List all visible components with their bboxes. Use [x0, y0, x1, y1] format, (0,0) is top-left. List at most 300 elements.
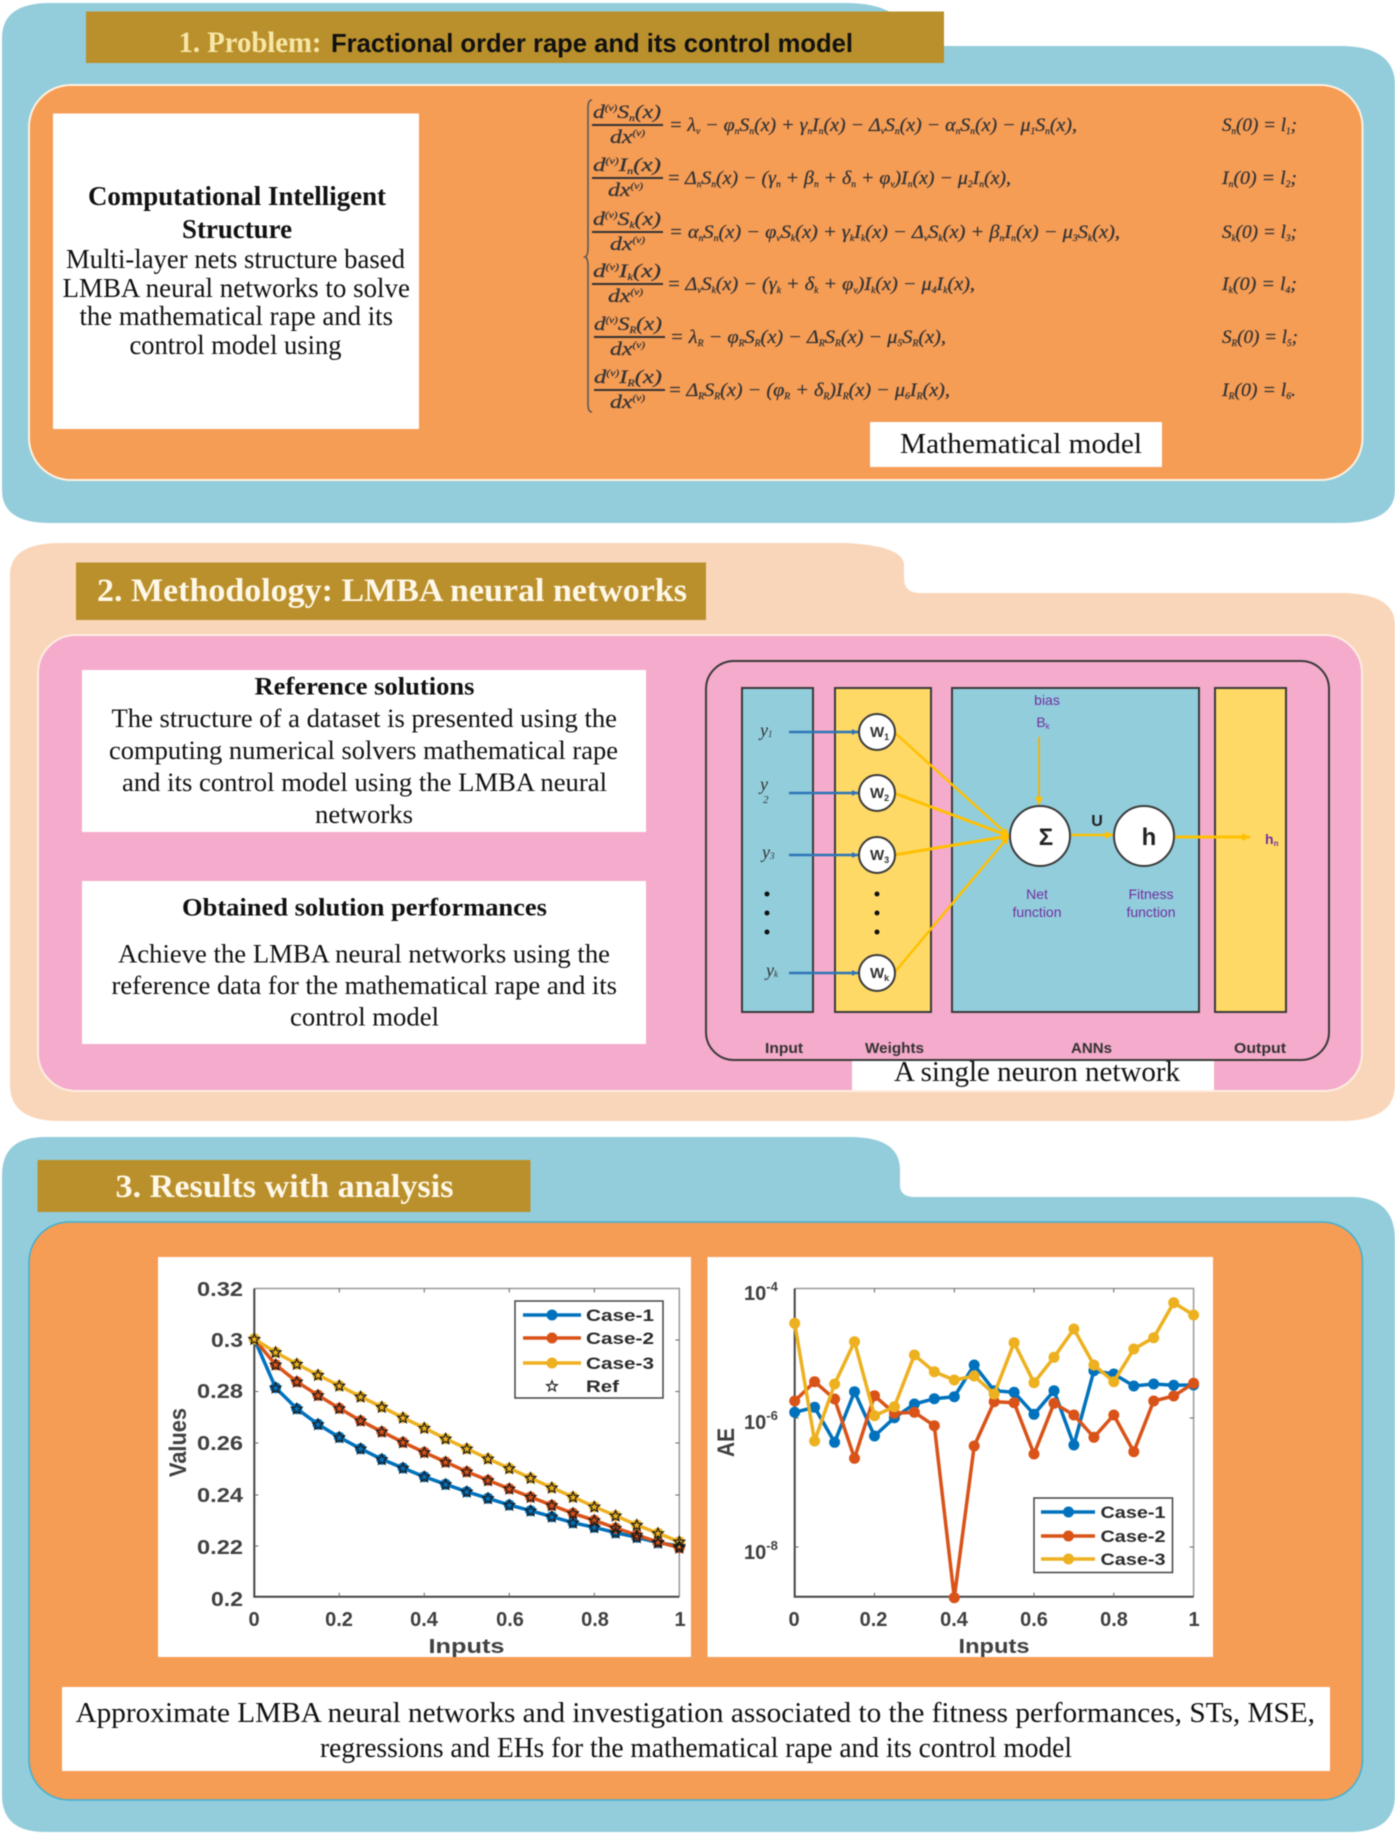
- equation 1: (x) − Δ: [824, 115, 881, 136]
- equation 2: d: [593, 155, 602, 176]
- caption: Mathematical model: [870, 422, 1162, 467]
- equation 1: n: [1232, 126, 1237, 136]
- equation 6: (x): [635, 367, 662, 388]
- equation 2: I: [617, 155, 629, 176]
- labels: bias, net function, fitness function, output: k: [1046, 722, 1051, 731]
- labels: bias, net function, fitness function, output: Net: [1026, 886, 1048, 902]
- input labels: k: [774, 969, 779, 979]
- equation 1: v: [696, 126, 700, 136]
- equation 5: (v): [606, 315, 618, 325]
- equation 2: I: [1222, 168, 1228, 189]
- text block: results summary: [62, 1687, 1330, 1771]
- y axis tick labels: 0.24: [197, 1485, 244, 1507]
- equation 3: d: [593, 209, 602, 230]
- node: fitness function h: h: [1142, 824, 1156, 851]
- equation 4: = Δ: [667, 274, 695, 295]
- equation 3: k: [1232, 233, 1237, 243]
- equation 4: k: [1229, 285, 1234, 295]
- equation 3: n: [1011, 233, 1017, 243]
- series: Case-2: [254, 1339, 679, 1548]
- equation 2: v: [890, 179, 895, 189]
- column labels: Output: [1234, 1040, 1286, 1057]
- equation 5: (x) − μ: [841, 327, 897, 348]
- y axis tick labels: 10: [744, 1412, 766, 1434]
- equation 3: S: [928, 222, 939, 243]
- equation 6: (x) − (φ: [720, 380, 784, 401]
- equation 4: ;: [1290, 274, 1297, 295]
- equation 1: dx: [610, 127, 628, 148]
- equation 6: = Δ: [668, 380, 696, 401]
- equation 3: k: [850, 233, 855, 243]
- equation 3: dx: [610, 234, 628, 255]
- line chart: AE vs Inputs: [708, 1257, 1213, 1658]
- equation 4: 4: [1286, 285, 1291, 295]
- equation 3: ;: [1291, 222, 1297, 243]
- equation 5: − φ: [703, 327, 739, 348]
- equation 1: ;: [1291, 115, 1297, 136]
- equation 5: S: [825, 327, 836, 348]
- equation 2: (x) − μ: [912, 168, 968, 189]
- equation 1: v: [881, 126, 885, 136]
- x axis tick labels: 1: [674, 1609, 686, 1631]
- equation 4: S: [701, 274, 712, 295]
- equation 5: S: [902, 327, 913, 348]
- equation 2: (x) − (γ: [716, 168, 776, 189]
- equation 4: k: [712, 285, 717, 295]
- equation 2: S: [701, 168, 712, 189]
- input labels: 2: [763, 794, 769, 806]
- equation 2: n: [627, 166, 634, 176]
- equation 3: S: [1222, 222, 1232, 243]
- series: Case-1: [254, 1339, 679, 1546]
- axes box: [795, 1288, 1194, 1597]
- ellipsis dots: [764, 892, 880, 934]
- equation 3: k: [791, 233, 796, 243]
- equation 4: (x) − (γ: [716, 274, 777, 295]
- equation 5: = λ: [670, 327, 696, 348]
- equation 6: + δ: [790, 380, 825, 401]
- equation 1: (x),: [1050, 115, 1077, 136]
- equation 1: S: [960, 115, 971, 136]
- text block: Computational Intelligent Structure: Computational Intelligent: [88, 181, 386, 211]
- equation 1: (v): [632, 128, 645, 138]
- labels: bias, net function, fitness function, output: n: [1274, 839, 1279, 848]
- text block: Computational Intelligent Structure: the mathematical rape and its: [80, 301, 393, 331]
- equation 2: dx: [608, 180, 626, 201]
- equation 6: R: [842, 391, 849, 401]
- equation 3: k: [629, 220, 636, 230]
- equation 6: (x) − μ: [849, 380, 905, 401]
- equation 1: (x): [635, 102, 661, 123]
- text block: Reference solutions: networks: [315, 800, 413, 829]
- equation 3: (x) − Δ: [865, 222, 924, 243]
- column labels: ANNs: [1071, 1040, 1112, 1057]
- x axis tick labels: 0.2: [325, 1609, 353, 1631]
- labels: bias, net function, fitness function, output: function: [1126, 904, 1176, 920]
- y axis tick labels: -6: [766, 1408, 778, 1423]
- equation 1: n: [749, 126, 755, 136]
- equation 5: S: [618, 314, 630, 335]
- equation 4: (x),: [947, 274, 975, 295]
- equation 3: (x) + γ: [795, 222, 850, 243]
- equation 2: n: [851, 179, 857, 189]
- equation 2: ;: [1290, 168, 1297, 189]
- equation 3: v: [776, 233, 781, 243]
- equation 6: (x),: [922, 380, 950, 401]
- axis titles: Values: [165, 1408, 192, 1477]
- equation 3: (x) − μ: [1016, 222, 1073, 243]
- equation 1: S: [617, 102, 630, 123]
- x axis tick labels: 0.2: [860, 1609, 887, 1631]
- equation 6: R: [626, 378, 635, 388]
- series: Case-1: [795, 1365, 1194, 1445]
- text block: Obtained solution performances: Achieve the LMBA neural networks using the: [118, 940, 610, 968]
- equation 3: S: [703, 222, 714, 243]
- input labels: y: [762, 842, 770, 862]
- equation 3: (x) + β: [943, 222, 1000, 243]
- equation 1: [592, 102, 1297, 148]
- equation 5: R: [738, 338, 745, 348]
- caption: A single neuron network: A single neuron network: [894, 1056, 1181, 1088]
- text block: Reference solutions: The structure of a dataset is presented using the: [112, 704, 617, 733]
- equation 4: k: [943, 285, 949, 295]
- equation 3: S: [781, 222, 791, 243]
- weight labels: 2: [884, 793, 889, 803]
- text block: Obtained solution performances: control model: [290, 1002, 439, 1032]
- equation 1: n: [1045, 126, 1050, 136]
- input labels: 1: [768, 729, 772, 739]
- equation 3: I: [1003, 222, 1013, 243]
- equation 5: R: [911, 338, 919, 348]
- equation 4: + δ: [781, 274, 815, 295]
- axis titles: Inputs: [428, 1636, 504, 1658]
- y axis tick labels: 10: [744, 1542, 766, 1564]
- column: ANNs: [952, 688, 1199, 1012]
- equation 5: R: [1231, 338, 1238, 348]
- equation 3: (0) = l: [1236, 222, 1286, 243]
- equation 5: dx: [610, 339, 628, 360]
- equation 3: k: [1088, 233, 1093, 243]
- equation 1: n: [629, 113, 635, 123]
- equation 1: (x) − α: [900, 115, 957, 136]
- equation 3: (v): [632, 235, 645, 245]
- equation 5: R: [834, 338, 841, 348]
- y axis tick labels: 0.2: [211, 1589, 243, 1611]
- equation 5: S: [745, 327, 755, 348]
- equation 2: + φ: [856, 168, 890, 189]
- text block: Reference solutions: [82, 670, 646, 832]
- equation 1: (0) = l: [1236, 115, 1286, 136]
- equation 6: R: [783, 391, 791, 401]
- equation 3: k: [938, 233, 944, 243]
- equation 2: n: [979, 179, 984, 189]
- weight labels: W: [870, 965, 884, 982]
- labels: bias, net function, fitness function, output: U: [1091, 813, 1103, 830]
- x axis tick labels: [248, 1609, 686, 1631]
- text block: Reference solutions: computing numerical solvers mathematical rape: [109, 736, 618, 765]
- x axis tick labels: 0.4: [410, 1609, 439, 1631]
- equation 1: n: [895, 126, 900, 136]
- equation 1: d: [593, 102, 602, 123]
- legend: [1034, 1498, 1172, 1572]
- equation 2: [592, 155, 1297, 201]
- equation 2: n: [814, 179, 819, 189]
- equation 2: n: [908, 179, 913, 189]
- equation 6: [594, 367, 1296, 413]
- labels: bias, net function, fitness function, output: B: [1036, 714, 1046, 730]
- input labels: 3: [769, 851, 775, 861]
- y axis tick labels: [744, 1279, 779, 1564]
- y axis tick labels: 0.26: [197, 1433, 243, 1455]
- equation 4: v: [853, 285, 858, 295]
- node: net function sum: [1010, 806, 1070, 866]
- input labels: [758, 720, 779, 980]
- equation 6: .: [1291, 380, 1296, 401]
- x axis tick labels: 0: [788, 1609, 800, 1631]
- text block: results summary: regressions and EHs for the mathematical rape and its control model: [320, 1733, 1072, 1764]
- equation 3: (v): [605, 210, 618, 220]
- equation 2: (x): [633, 155, 661, 176]
- equation 3: I: [853, 222, 863, 243]
- series: Case-2: [795, 1382, 1194, 1598]
- text block: Computational Intelligent Structure: [53, 114, 419, 429]
- legend: Case-2: [1100, 1527, 1166, 1546]
- equation 1: n: [807, 126, 813, 136]
- equation 5: [594, 314, 1298, 360]
- panel: 2. Methodology: [10, 543, 1395, 1121]
- equation 1: S: [739, 115, 750, 136]
- equation 6: R: [713, 391, 721, 401]
- equation 1: 1: [1286, 126, 1291, 136]
- equation 6: R: [916, 391, 923, 401]
- arrows: weights to net function: [894, 732, 1250, 973]
- panel: 3. Results with analysis: [2, 1137, 1395, 1832]
- equation 2: (v): [606, 156, 619, 166]
- equation 3: 3: [1072, 233, 1078, 243]
- equation 2: I: [972, 168, 981, 189]
- equation 5: S: [1222, 327, 1232, 348]
- x axis tick labels: 0.6: [496, 1609, 524, 1631]
- column labels: Weights: [865, 1040, 924, 1057]
- equation 5: (x) − Δ: [761, 327, 819, 348]
- equation 5: ;: [1292, 327, 1298, 348]
- legend: Case-2: [586, 1329, 654, 1348]
- heading: 3. Results with analysis: [38, 1160, 530, 1212]
- equation 1: S: [1222, 115, 1232, 136]
- axis titles: [713, 1428, 1030, 1658]
- series: Case-3: [254, 1339, 679, 1542]
- equation 2: n: [711, 179, 717, 189]
- equation 5: (x): [636, 314, 662, 335]
- text block: Computational Intelligent Structure: Structure: [182, 214, 292, 244]
- equation 3: k: [861, 233, 866, 243]
- equation 6: (v): [606, 368, 619, 378]
- equation 4: + φ: [818, 274, 853, 295]
- equation 2: n: [1229, 179, 1234, 189]
- text block: Reference solutions: Reference solutions: [254, 674, 475, 700]
- equation 4: (v): [606, 262, 619, 272]
- equation 5: (v): [632, 340, 645, 350]
- node: fitness function h: [1114, 806, 1174, 866]
- y axis tick labels: [197, 1279, 244, 1611]
- text block: results summary: Approximate LMBA neural networks and investigation associated to the fitness performances, STs, MSE,: [76, 1698, 1315, 1729]
- text block: Obtained solution performances: Obtained solution performances: [182, 894, 547, 922]
- line chart: Values vs Inputs: [158, 1257, 691, 1658]
- equation 3: [592, 209, 1297, 255]
- text block: Computational Intelligent Structure: LMBA neural networks to solve: [62, 273, 410, 303]
- series: Ref stars: [254, 1339, 679, 1548]
- y axis tick labels: 0.32: [197, 1279, 243, 1301]
- equation 5: 5: [897, 338, 903, 348]
- equation 4: 4: [932, 285, 937, 295]
- equation 1: n: [956, 126, 961, 136]
- equation 2: 2: [968, 179, 973, 189]
- heading: 2. Methodology: 2. Methodology: LMBA neural networks: [97, 573, 687, 609]
- equation 3: v: [924, 233, 928, 243]
- x axis tick labels: 0.8: [1100, 1609, 1128, 1631]
- column labels: [765, 1040, 1286, 1057]
- axis titles: Inputs: [958, 1636, 1030, 1658]
- column: weights: [835, 688, 931, 1012]
- equation 4: I: [935, 274, 945, 295]
- equation 1: n: [970, 126, 976, 136]
- text block: Obtained solution performances: [82, 881, 646, 1044]
- equation 4: (x) − μ: [875, 274, 932, 295]
- equation system: mathematical model: [585, 100, 1298, 413]
- column: input: [742, 688, 813, 1012]
- labels: bias, net function, fitness function, output: h: [1265, 831, 1274, 847]
- equation 5: R: [818, 338, 825, 348]
- equation 1: (x) + γ: [754, 115, 808, 136]
- equation 1: − φ: [700, 115, 735, 136]
- weight labels: 3: [884, 855, 889, 865]
- equation 6: I: [1222, 380, 1228, 401]
- equation 4: dx: [608, 286, 626, 307]
- series: Case-3: [795, 1303, 1194, 1441]
- y axis tick labels: -8: [766, 1538, 778, 1553]
- heading: 1. Problem: 1. Problem:: [178, 26, 322, 59]
- inner panel: results content background: [29, 1222, 1362, 1800]
- equation 2: n: [776, 179, 781, 189]
- equation 5: R: [754, 338, 761, 348]
- axis titles: AE: [713, 1428, 740, 1457]
- equation 1: n: [735, 126, 740, 136]
- equation 4: (v): [630, 287, 643, 297]
- legend: Ref: [586, 1377, 619, 1396]
- y axis tick labels: 0.22: [197, 1537, 243, 1559]
- text block: Obtained solution performances: reference data for the mathematical rape and its: [112, 971, 617, 1000]
- equation 6: R: [697, 391, 705, 401]
- y axis tick labels: 0.28: [197, 1381, 243, 1403]
- equation 5: (x),: [918, 327, 946, 348]
- equation 5: d: [594, 314, 604, 335]
- equation 6: (0) = l: [1234, 380, 1286, 401]
- equation 5: 5: [1287, 338, 1292, 348]
- column: output: [1215, 688, 1286, 1012]
- equation 2: (v): [630, 181, 643, 191]
- inner panel: methodology content background: [38, 635, 1362, 1091]
- text block: Reference solutions: and its control model using the LMBA neural: [122, 768, 607, 797]
- caption: Mathematical model: Mathematical model: [900, 428, 1142, 460]
- equation 3: S: [1078, 222, 1088, 243]
- equation 1: (x) − μ: [975, 115, 1031, 136]
- equation 1: I: [811, 115, 821, 136]
- weight labels: W: [870, 724, 884, 741]
- equation 2: = Δ: [667, 168, 695, 189]
- equation 1: S: [1035, 115, 1046, 136]
- equation 1: = λ: [669, 115, 695, 136]
- text block: Computational Intelligent Structure: Multi-layer nets structure based: [66, 244, 405, 274]
- equation 6: I: [909, 380, 918, 401]
- equation 2: )I: [893, 168, 910, 189]
- x axis tick labels: [788, 1609, 1200, 1631]
- equation 3: S: [618, 209, 630, 230]
- equation 2: + δ: [819, 168, 852, 189]
- equation 3: (x): [634, 209, 661, 230]
- text block: Computational Intelligent Structure: control model using: [130, 330, 342, 360]
- input labels: y: [760, 720, 768, 740]
- equation 2: (x),: [984, 168, 1011, 189]
- equation 4: [592, 261, 1297, 307]
- equation 4: k: [871, 285, 876, 295]
- legend: [515, 1301, 663, 1398]
- brace: [585, 100, 592, 412]
- legend: Case-1: [586, 1306, 654, 1325]
- x axis tick labels: 0: [248, 1609, 260, 1631]
- equation 1: S: [885, 115, 895, 136]
- equation 4: (x): [633, 261, 661, 282]
- equation 3: (x),: [1092, 222, 1120, 243]
- equation 4: (0) = l: [1233, 274, 1286, 295]
- column labels: Input: [765, 1040, 803, 1057]
- weight labels: 1: [884, 732, 889, 742]
- x axis tick labels: 1: [1188, 1609, 1200, 1631]
- equation 1: 1: [1031, 126, 1035, 136]
- equation 5: (0) = l: [1237, 327, 1287, 348]
- heading: 1. Problem: [86, 12, 944, 63]
- equation 3: n: [1000, 233, 1005, 243]
- equation 5: R: [628, 325, 637, 335]
- equation 4: v: [697, 285, 701, 295]
- equation 2: (0) = l: [1233, 168, 1286, 189]
- equation 6: I: [618, 367, 630, 388]
- equation 4: I: [618, 261, 630, 282]
- equation 3: 3: [1285, 233, 1291, 243]
- legend: Case-3: [1100, 1550, 1166, 1569]
- equation 4: )I: [857, 274, 873, 295]
- weight labels: W: [870, 785, 884, 802]
- y axis tick labels: -4: [766, 1279, 779, 1294]
- equation 5: R: [697, 338, 704, 348]
- equation 3: n: [699, 233, 704, 243]
- equation 4: k: [777, 285, 782, 295]
- equation 6: R: [822, 391, 830, 401]
- equation 3: (x) − φ: [718, 222, 776, 243]
- equation 4: k: [627, 272, 634, 282]
- equation 1: (v): [605, 103, 617, 113]
- y axis tick labels: 10: [744, 1283, 766, 1305]
- node: net function sum: Σ: [1039, 824, 1053, 851]
- y axis tick labels: 0.3: [211, 1330, 243, 1352]
- legend: Case-1: [1100, 1503, 1166, 1522]
- equation 4: I: [1222, 274, 1228, 295]
- input labels: y: [766, 960, 774, 980]
- equation 3: = α: [669, 222, 697, 243]
- equation 4: d: [593, 261, 602, 282]
- equation 3: n: [714, 233, 719, 243]
- equation 2: 2: [1286, 179, 1291, 189]
- x axis tick labels: 0.6: [1020, 1609, 1048, 1631]
